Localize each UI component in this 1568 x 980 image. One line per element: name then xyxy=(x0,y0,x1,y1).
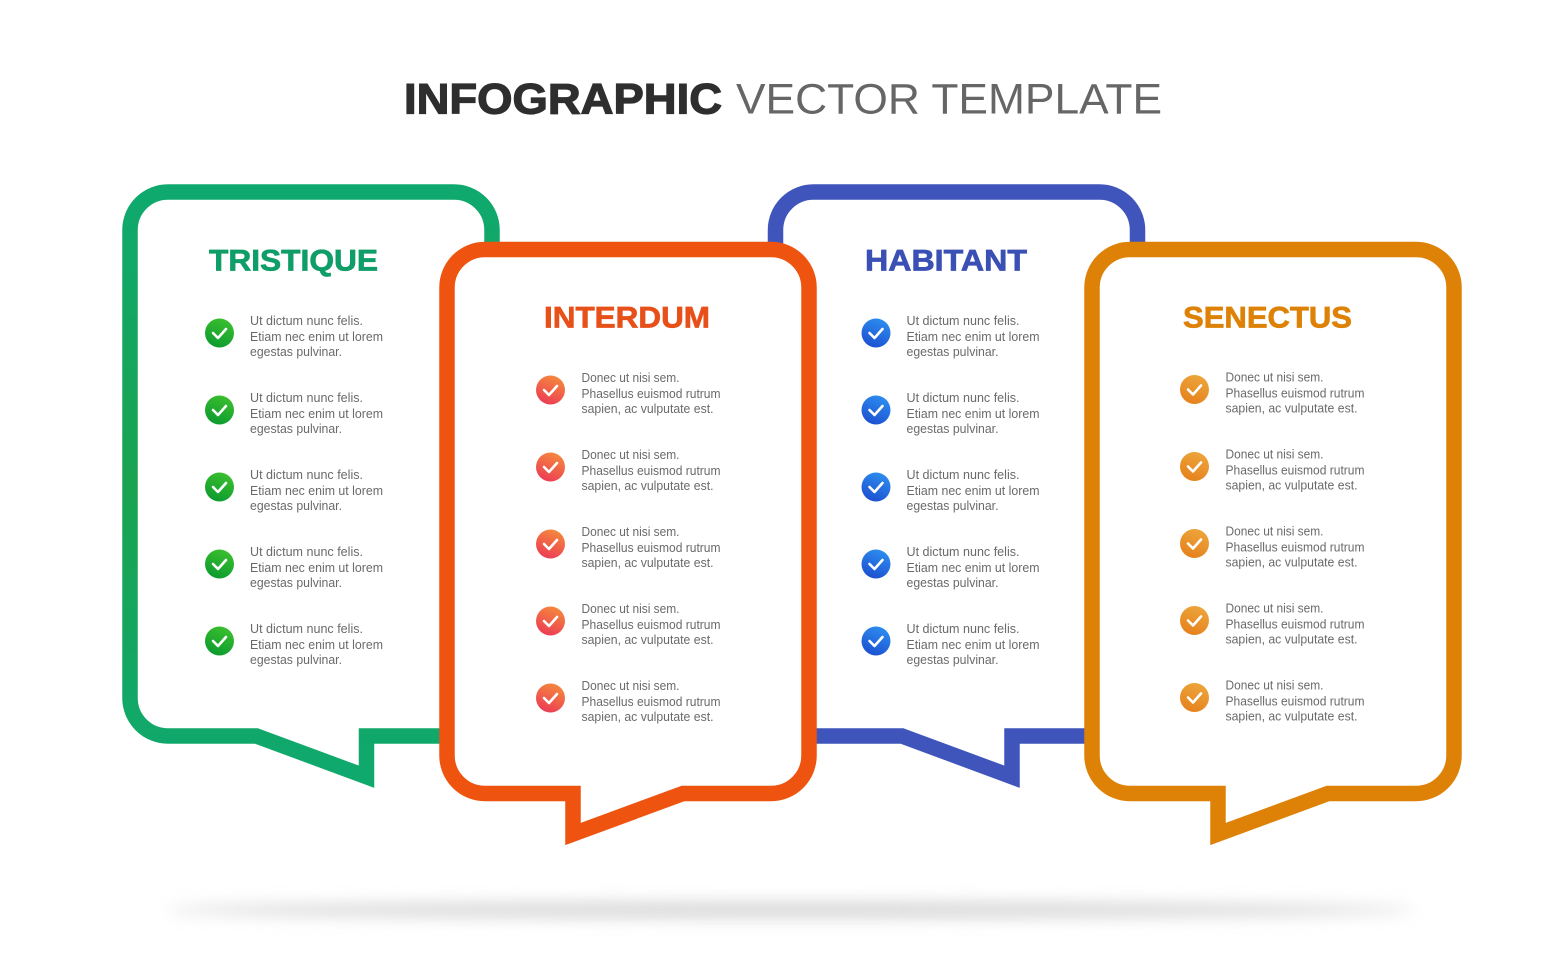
list item 4 xyxy=(205,545,383,590)
list item 3: sapien, ac vulputate est. xyxy=(1226,556,1358,570)
green speech bubble xyxy=(130,192,492,777)
title xyxy=(404,76,1162,124)
list item 4: sapien, ac vulputate est. xyxy=(582,633,714,647)
list item 2 xyxy=(536,448,720,493)
heading: senectus: SENECTUS xyxy=(1183,302,1352,334)
list item 3: sapien, ac vulputate est. xyxy=(582,556,714,570)
list item 5: egestas pulvinar. xyxy=(250,653,342,667)
list item 3: egestas pulvinar. xyxy=(250,499,342,513)
list item 4: Etiam nec enim ut lorem xyxy=(250,561,383,575)
list item 2: Phasellus euismod rutrum xyxy=(1226,464,1364,478)
list item 4: egestas pulvinar. xyxy=(906,576,998,590)
heading: habitant: HABITANT xyxy=(865,244,1027,278)
list item 1 xyxy=(1180,370,1364,416)
list item 1 xyxy=(862,314,1040,359)
list item 3 xyxy=(862,468,1040,513)
list item 1: Phasellus euismod rutrum xyxy=(582,387,720,401)
list item 5: Ut dictum nunc felis. xyxy=(906,622,1020,636)
list item 2: Donec ut nisi sem. xyxy=(582,448,680,462)
panel: habitant xyxy=(776,192,1138,777)
list item 4: Donec ut nisi sem. xyxy=(1226,602,1324,616)
list item 4: egestas pulvinar. xyxy=(250,576,342,590)
list item 5 xyxy=(862,622,1040,667)
blue speech bubble xyxy=(776,192,1138,777)
list item 5: Donec ut nisi sem. xyxy=(582,679,680,693)
list item 3: Phasellus euismod rutrum xyxy=(1226,540,1364,554)
panel: tristique xyxy=(130,192,492,777)
list item 5: sapien, ac vulputate est. xyxy=(1226,710,1358,724)
list item 1: sapien, ac vulputate est. xyxy=(1226,402,1358,416)
list item 1 xyxy=(536,371,720,416)
list item 2: sapien, ac vulputate est. xyxy=(582,479,714,493)
list item 3 xyxy=(1180,524,1364,570)
list item 2 xyxy=(205,391,383,436)
list item 3: Etiam nec enim ut lorem xyxy=(250,484,383,498)
list item 5: Phasellus euismod rutrum xyxy=(1226,694,1364,708)
list item 3 xyxy=(536,525,720,570)
red speech bubble xyxy=(447,250,809,834)
list item 4: sapien, ac vulputate est. xyxy=(1226,632,1358,646)
list item 4: Phasellus euismod rutrum xyxy=(1226,618,1364,632)
list item 3 xyxy=(205,468,383,513)
list item 4: Donec ut nisi sem. xyxy=(582,602,680,616)
list item 1: Ut dictum nunc felis. xyxy=(906,314,1020,328)
heading: tristique: TRISTIQUE xyxy=(209,244,378,278)
list item 2: Etiam nec enim ut lorem xyxy=(906,407,1040,421)
list item 1: Donec ut nisi sem. xyxy=(582,371,680,385)
list item 1: Ut dictum nunc felis. xyxy=(250,314,363,328)
list item 1: Phasellus euismod rutrum xyxy=(1226,386,1364,400)
list item 1: Etiam nec enim ut lorem xyxy=(250,330,383,344)
list item 5 xyxy=(536,679,720,724)
ground shadow xyxy=(165,902,1415,918)
list item 5: Etiam nec enim ut lorem xyxy=(250,638,383,652)
list item 5: Donec ut nisi sem. xyxy=(1226,678,1324,692)
list item 4 xyxy=(1180,602,1364,646)
list item 3: Donec ut nisi sem. xyxy=(582,525,680,539)
list item 5: sapien, ac vulputate est. xyxy=(582,710,714,724)
list item 2 xyxy=(1180,448,1364,492)
list item 5 xyxy=(1180,678,1364,724)
list item 1: Etiam nec enim ut lorem xyxy=(906,330,1040,344)
list item 1 xyxy=(205,314,383,359)
list item 2: Ut dictum nunc felis. xyxy=(906,391,1020,405)
list item 3: Donec ut nisi sem. xyxy=(1226,524,1324,538)
list item 2: egestas pulvinar. xyxy=(250,422,342,436)
list item 1: sapien, ac vulputate est. xyxy=(582,402,714,416)
list item 1: egestas pulvinar. xyxy=(906,345,998,359)
list item 3: egestas pulvinar. xyxy=(906,499,998,513)
list item 2: Donec ut nisi sem. xyxy=(1226,448,1324,462)
list item 3: Phasellus euismod rutrum xyxy=(582,541,720,555)
title: INFOGRAPHIC xyxy=(404,76,722,124)
list item 4: Etiam nec enim ut lorem xyxy=(906,561,1040,575)
list item 2: Ut dictum nunc felis. xyxy=(250,391,363,405)
list item 5: Phasellus euismod rutrum xyxy=(582,695,720,709)
list item 5: Etiam nec enim ut lorem xyxy=(906,638,1040,652)
list item 5: egestas pulvinar. xyxy=(906,653,998,667)
panel: senectus xyxy=(1092,250,1454,834)
list item 5: Ut dictum nunc felis. xyxy=(250,622,363,636)
list item 3: Ut dictum nunc felis. xyxy=(906,468,1020,482)
list item 2: Phasellus euismod rutrum xyxy=(582,464,720,478)
panel: interdum xyxy=(447,250,809,834)
list item 4: Ut dictum nunc felis. xyxy=(250,545,363,559)
list item 2: Etiam nec enim ut lorem xyxy=(250,407,383,421)
list item 4 xyxy=(862,545,1040,590)
heading: interdum: INTERDUM xyxy=(544,302,710,334)
list item 3: Etiam nec enim ut lorem xyxy=(906,484,1040,498)
list item 4: Ut dictum nunc felis. xyxy=(906,545,1020,559)
list item 1: egestas pulvinar. xyxy=(250,345,342,359)
amber speech bubble xyxy=(1092,250,1454,834)
list item 1: Donec ut nisi sem. xyxy=(1226,370,1324,384)
list item 2: sapien, ac vulputate est. xyxy=(1226,478,1358,492)
list item 3: Ut dictum nunc felis. xyxy=(250,468,363,482)
list item 2: egestas pulvinar. xyxy=(906,422,998,436)
list item 4: Phasellus euismod rutrum xyxy=(582,618,720,632)
list item 4 xyxy=(536,602,720,647)
list item 2 xyxy=(862,391,1040,436)
title: VECTOR TEMPLATE xyxy=(736,76,1162,124)
list item 5 xyxy=(205,622,383,667)
